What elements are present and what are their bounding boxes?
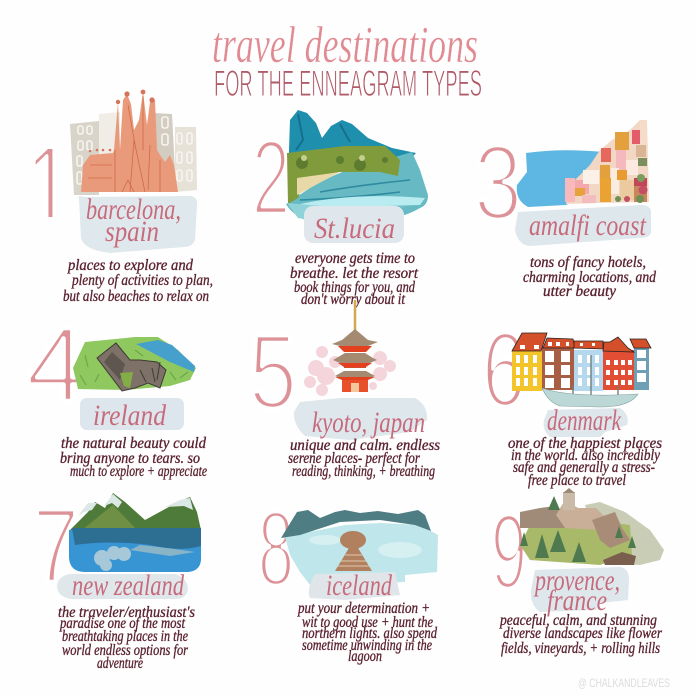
destination name: france [547,584,607,617]
number 9: 9 [491,493,527,611]
description: in the world. also incredibly [511,447,661,464]
description: unique and calm. endless [290,437,440,454]
number 6: 6 [482,311,526,429]
title [212,17,482,104]
description [523,254,657,300]
number 1: 1 [26,123,72,251]
description: the traveler/enthusiast's [58,604,195,621]
number 8: 8 [258,490,294,608]
description: book things for you, and [294,279,416,296]
panel: 2 st lucia [252,110,428,308]
description [499,612,663,657]
label background [78,196,197,253]
label background [515,205,651,246]
description: peaceful, calm, and stunning [499,612,657,629]
illustration: nyhavn houses and boat [512,333,651,407]
description: free place to travel [528,472,626,489]
description [63,257,213,305]
illustration: mountains and lake [69,493,201,572]
description: utter beauty [543,283,617,300]
panel: 9 provence [491,488,664,657]
illustration: provence village [520,488,664,565]
description: bring anyone to tears. so [60,450,200,467]
label background [544,408,628,437]
description [297,600,438,665]
description: much to explore + appreciate [70,463,207,480]
illustration: irish castle landscape [73,337,196,391]
description: paradise one of the most [59,615,185,632]
illustration: blue lagoon [281,510,438,585]
description: wit to good use + hunt the [302,614,433,631]
destination name: new zealand [72,569,185,602]
description: everyone gets time to [295,250,415,267]
illustration: pagoda and cherry blossoms [304,300,396,396]
label background [309,572,400,600]
description: sometime unwinding in the [302,637,432,654]
description [288,437,440,480]
description: serene places- perfect for [288,450,421,467]
illustration: amalfi coast [517,120,649,207]
number 4: 4 [26,306,86,424]
destination name: provence, [534,564,620,597]
panel: 1 barcelona [26,90,213,305]
description: safe and generally a stress- [513,459,655,476]
destination name: ireland [93,399,167,432]
label background [57,574,188,599]
number 3: 3 [474,124,522,242]
label background [80,398,184,430]
destination name: St.lucia [314,212,395,245]
description: breathtaking places in the [62,628,188,645]
description: reading, thinking, + breathing [292,463,435,480]
panel: 6 denmark [482,311,662,489]
panel: 4 ireland [26,306,207,480]
description: one of the happiest places [508,435,662,452]
panel: 7 new zealand [33,487,201,672]
description: don't worry about it [301,291,405,308]
title script line: travel destinations [212,17,478,74]
panel: 5 kyoto [249,300,440,480]
destination name [534,564,620,617]
description [508,435,662,489]
description: diverse landscapes like flower [503,625,663,642]
description [290,250,419,308]
description [60,435,207,480]
description: world endless options for [62,642,189,659]
destination name: denmark [547,404,621,437]
number 2: 2 [252,119,290,237]
description: charming locations, and [523,269,657,286]
destination name: amalfi coast [529,209,647,242]
description: northern lights. also spend [302,625,438,642]
description: places to explore and [67,257,194,274]
description: lagoon [348,648,382,665]
illustration: st lucia island [286,110,428,222]
destination name: barcelona, [86,193,181,226]
destination name: spain [105,215,159,248]
label background [294,398,427,440]
destination name: iceland [326,569,393,602]
description: the natural beauty could [61,435,207,452]
label background [531,567,629,612]
description: but also beaches to relax on [63,288,209,305]
illustration: sagrada familia [70,90,197,195]
description: plenty of activities to plan, [71,272,213,289]
number 7: 7 [33,487,79,605]
description: adventure [97,655,143,672]
number 5: 5 [249,313,297,431]
description: breathe. let the resort [290,265,419,282]
panel: 8 iceland [258,490,438,665]
description: tons of fancy hotels, [530,254,646,271]
label background [304,206,404,243]
description: put your determination + [297,600,430,617]
panel: 3 amalfi coast [474,120,657,300]
destination name: kyoto, japan [312,406,425,439]
destination name [86,193,181,248]
description [58,604,195,672]
